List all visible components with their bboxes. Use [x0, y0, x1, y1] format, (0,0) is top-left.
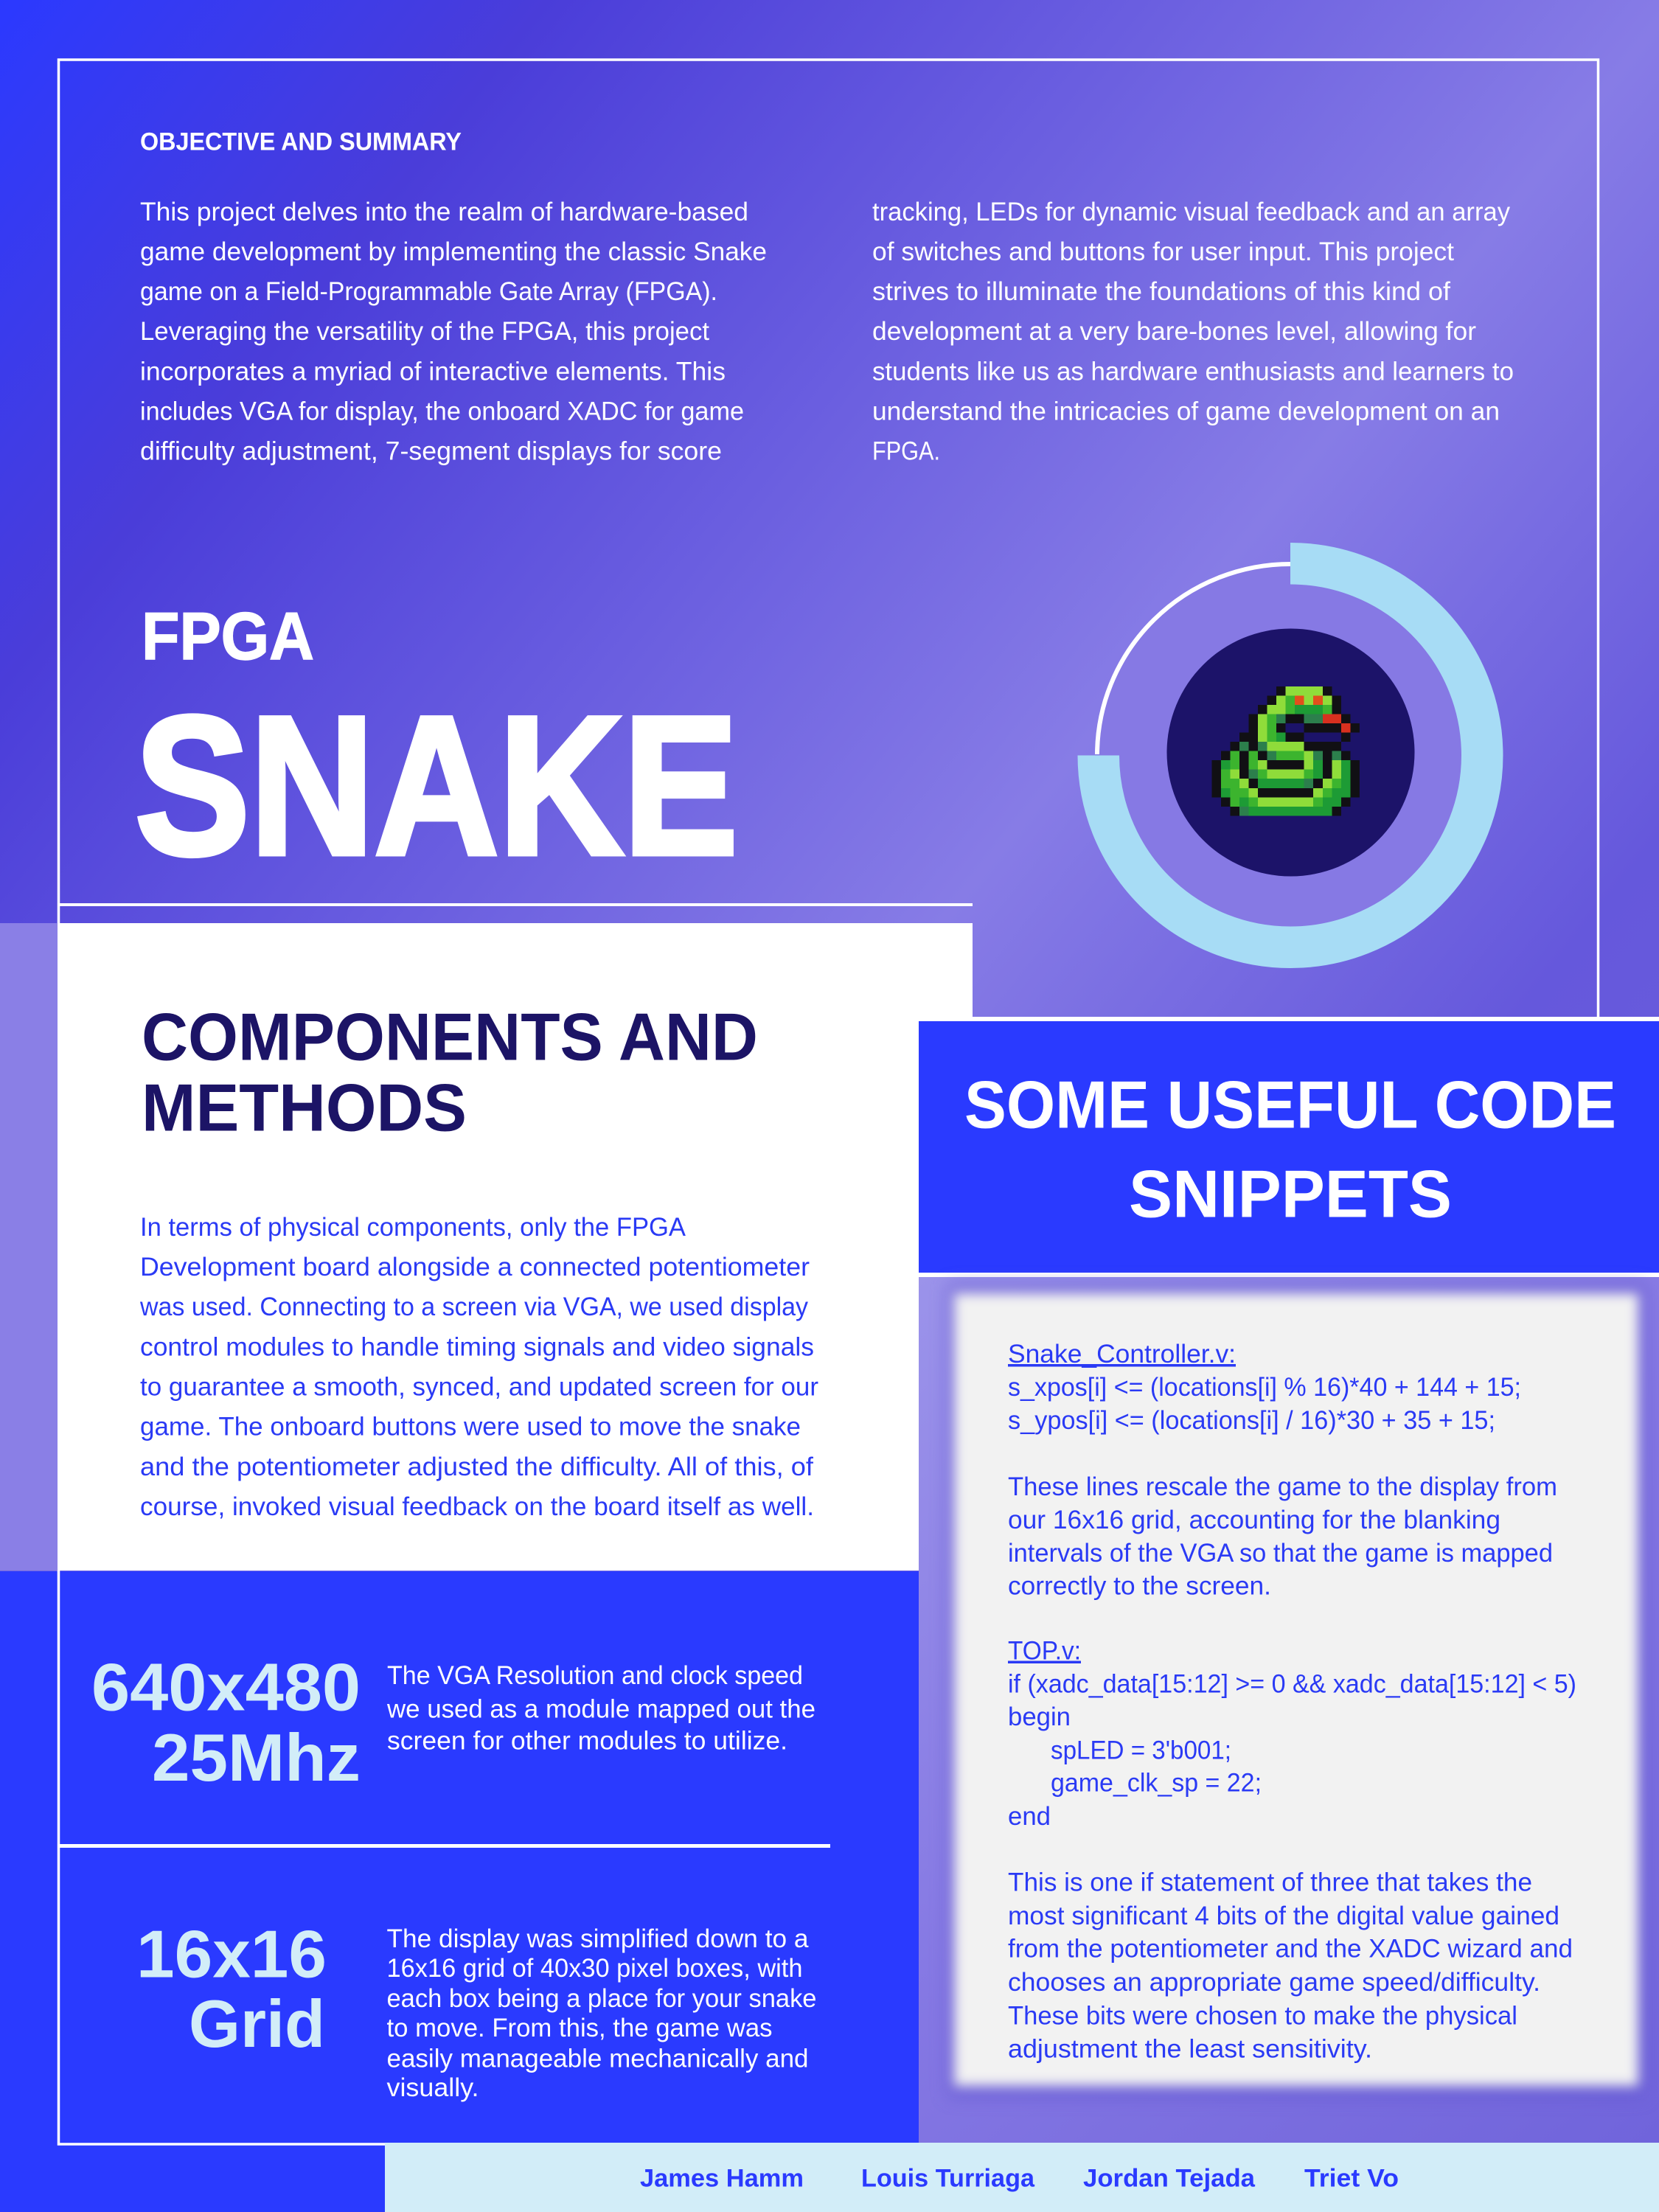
panel: objective and summary	[140, 128, 1514, 466]
text block: if statement explanation: adjustment the least sensitivity.	[1008, 2035, 1372, 2063]
text block: rescale explanation: These lines rescale the game to the display from	[1008, 1472, 1557, 1501]
text block: summary right column: of switches and buttons for user input. This project	[872, 237, 1454, 266]
text block: components body: and the potentiometer adjusted the difficulty. All of this, of	[140, 1453, 813, 1481]
heading: components and methods: COMPONENTS AND	[142, 1000, 758, 1075]
frame left edge over stats	[59, 1571, 385, 2144]
text block: summary left column: This project delves into the realm of hardware-based	[140, 198, 748, 226]
text block: summary left column: game development by implementing the classic Snake	[140, 237, 767, 266]
panel background	[59, 923, 973, 1571]
heading: some useful code snippets	[964, 1068, 1616, 1231]
text block: summary left column: Leveraging the versatility of the FPGA, this project	[140, 317, 709, 346]
text block: resolution description: we used as a module mapped out the	[386, 1694, 815, 1724]
stat value: 16x16 Grid: 16x16	[136, 1917, 327, 1992]
icon: pixel snake	[1212, 686, 1360, 815]
header bottom rule	[919, 1273, 1659, 1277]
heading: components and methods	[142, 1000, 758, 1146]
text block: components body: Development board alongside a connected potentiometer	[140, 1253, 810, 1281]
icon: ring with snake	[1097, 563, 1482, 947]
text block: summary left column	[140, 198, 767, 466]
text block: summary left column: difficulty adjustment, 7-segment displays for score	[140, 437, 722, 466]
text block: grid description: easily manageable mechanically and	[386, 2044, 808, 2073]
text block: grid description: to move. From this, the game was	[386, 2014, 773, 2042]
title: SNAKE: SNAKE	[135, 675, 738, 896]
text block: grid description	[386, 1924, 817, 2102]
text block: if statement explanation	[1008, 1868, 1573, 2063]
author names	[640, 2165, 1399, 2193]
heading: components and methods: METHODS	[142, 1071, 467, 1146]
text block: resolution description: screen for other modules to utilize.	[387, 1727, 787, 1755]
text block: components body: to guarantee a smooth, synced, and updated screen for our	[140, 1373, 818, 1401]
text block: if statement explanation: chooses an appropriate game speed/difficulty.	[1008, 1968, 1540, 1997]
panel: stats background	[0, 1571, 919, 2212]
text block: top module code	[1008, 1637, 1576, 1831]
text block: summary left column: includes VGA for display, the onboard XADC for game	[140, 397, 744, 426]
text block: summary right column: strives to illuminate the foundations of this kind of	[872, 277, 1450, 306]
text block: components body: control modules to handle timing signals and video signals	[140, 1333, 814, 1361]
footer background	[385, 2143, 1659, 2212]
text block: components body: In terms of physical components, only the FPGA	[140, 1213, 686, 1242]
blurred code card	[954, 1293, 1638, 2086]
panel: code snippets	[919, 1277, 1659, 2143]
text block: summary right column: students like us as hardware enthusiasts and learners to	[872, 357, 1514, 386]
text block: top module code: begin	[1008, 1703, 1071, 1731]
text block: resolution description: The VGA Resolution and clock speed	[387, 1661, 803, 1690]
text block: rescale explanation: correctly to the screen.	[1008, 1572, 1271, 1600]
text block: summary right column: FPGA.	[872, 437, 940, 466]
text block: if statement explanation: This is one if statement of three that takes the	[1008, 1868, 1532, 1896]
author names: James Hamm	[640, 2165, 804, 2193]
text block: rescale explanation: intervals of the VGA so that the game is mapped	[1008, 1539, 1553, 1568]
stat value: 16x16 Grid: Grid	[189, 1987, 325, 2062]
text block: summary left column: game on a Field-Programmable Gate Array (FPGA).	[140, 277, 717, 306]
heading: some useful code snippets: SNIPPETS	[1129, 1158, 1452, 1231]
stat value: 16x16 Grid	[136, 1917, 327, 2062]
stat value: 640x480 25Mhz: 640x480	[91, 1650, 361, 1725]
text block: summary left column: incorporates a myriad of interactive elements. This	[140, 357, 726, 386]
heading: some useful code snippets: SOME USEFUL CODE	[964, 1068, 1616, 1143]
title: FPGA: FPGA	[142, 599, 314, 674]
text block: components body: game. The onboard buttons were used to move the snake	[140, 1413, 801, 1441]
text block: summary right column: tracking, LEDs for dynamic visual feedback and an array	[872, 198, 1510, 226]
text block: top module code: TOP.v:	[1008, 1637, 1081, 1665]
text block: summary right column: understand the intricacies of game development on an	[872, 397, 1500, 426]
title	[135, 599, 738, 896]
text block: if statement explanation: most significant 4 bits of the digital value gained	[1008, 1902, 1559, 1930]
text block: summary right column	[872, 198, 1514, 466]
blurred shadow	[948, 1284, 1646, 2097]
text block: summary right column: development at a very bare-bones level, allowing for	[872, 317, 1476, 346]
text block: top module code: end	[1008, 1802, 1051, 1831]
text block: grid description: each box being a place for your snake	[386, 1984, 817, 2013]
text block: rescale explanation	[1008, 1472, 1557, 1600]
footer: authors	[385, 2143, 1659, 2212]
author names: Louis Turriaga	[861, 2165, 1035, 2193]
text block: rescale explanation: our 16x16 grid, accounting for the blanking	[1008, 1506, 1500, 1534]
text block: snake controller code: Snake_Controller.v:	[1008, 1340, 1236, 1368]
stat: grid	[136, 1917, 817, 2102]
header top rule	[919, 1017, 1659, 1021]
text block: snake controller code: s_xpos[i] <= (locations[i] % 16)*40 + 144 + 15;	[1008, 1373, 1521, 1402]
text block: if statement explanation: from the potentiometer and the XADC wizard and	[1008, 1935, 1573, 1963]
thick ring arc	[1099, 563, 1482, 947]
panel gradient background	[919, 1277, 1659, 2143]
text block: snake controller code	[1008, 1340, 1521, 1435]
text block: grid description: visually.	[386, 2073, 479, 2102]
text block: components body	[139, 1213, 818, 1521]
text block: components body: course, invoked visual feedback on the board itself as well.	[140, 1492, 814, 1521]
text block: snake controller code: s_ypos[i] <= (locations[i] / 16)*30 + 35 + 15;	[1008, 1406, 1495, 1435]
panel: left accent strip	[0, 923, 58, 1571]
ring inner disc	[1099, 563, 1482, 947]
author names: Jordan Tejada	[1083, 2165, 1256, 2193]
divider between stats	[59, 1844, 830, 1848]
panel: code snippets header	[919, 1017, 1659, 1277]
stat: resolution and clock	[91, 1650, 815, 1795]
stat value: 640x480 25Mhz: 25Mhz	[152, 1721, 361, 1795]
text block: components body: was used. Connecting to a screen via VGA, we used display	[139, 1293, 808, 1321]
text block: grid description: The display was simplified down to a	[386, 1924, 809, 1953]
dark circle	[1166, 628, 1414, 876]
text block: top module code: spLED = 3'b001;	[1051, 1736, 1231, 1765]
text block: grid description: 16x16 grid of 40x30 pixel boxes, with	[386, 1954, 802, 1983]
divider under title	[59, 903, 973, 906]
header background	[919, 1021, 1659, 1273]
stat value: 640x480 25Mhz	[91, 1650, 361, 1795]
heading: objective and summary: OBJECTIVE AND SUMMARY	[140, 128, 462, 156]
text block: if statement explanation: These bits were chosen to make the physical	[1008, 2001, 1517, 2031]
panel: components and methods	[59, 923, 973, 1571]
text block: top module code: game_clk_sp = 22;	[1051, 1768, 1262, 1798]
thin white arc	[1097, 564, 1290, 754]
text block: resolution description	[386, 1661, 815, 1755]
text block: top module code: if (xadc_data[15:12] >= 0 && xadc_data[15:12] < 5)	[1008, 1669, 1576, 1699]
author names: Triet Vo	[1304, 2165, 1399, 2193]
